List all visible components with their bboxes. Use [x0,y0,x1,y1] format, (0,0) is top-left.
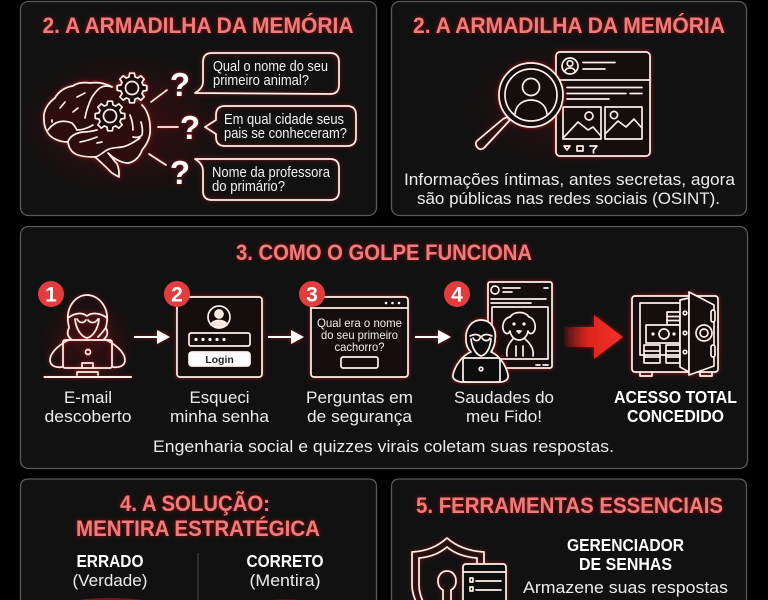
panel: memory trap questions [15,2,376,216]
bubble: teacher: Nome da professora [212,165,331,181]
badge 1 [38,281,64,307]
icon: brain with gears [44,73,150,177]
column: correct: CORRETO [246,551,324,571]
result: open safe [614,287,737,426]
panel: OSINT exposure [392,2,746,216]
step 4: hacker and dog post [444,281,554,426]
connector lines [149,90,178,165]
heading: strategic lie [76,491,320,541]
caption 4: Saudades do [454,388,554,407]
badge 4: 4 [451,284,463,306]
icon: hooded hacker [44,295,131,377]
icon: social post with dog [488,282,552,368]
question marks: ? [170,154,190,191]
window question [317,316,402,354]
password dots [194,338,226,341]
caption 1: E-mail [64,388,112,407]
question marks [170,66,200,191]
icon: browser window [311,297,408,377]
column: correct: (Mentira) [250,571,320,590]
bubble: first animal: primeiro animal? [213,73,309,89]
footer sentence: Engenharia social e quizzes virais coletam suas respostas. [153,437,614,456]
window question: Qual era o nome [317,316,402,330]
tool title: DE SENHAS [579,554,672,574]
badge 3: 3 [306,284,318,306]
heading: how it works: 3. COMO O GOLPE FUNCIONA [236,240,532,265]
column: wrong: ERRADO [76,551,144,571]
icon: second hacker [453,320,508,382]
panel: the solution [20,479,376,600]
window dots [385,302,400,304]
bubble: first animal [195,53,339,94]
question marks: ? [180,109,200,146]
step 3: security question [299,281,413,426]
heading: strategic lie: MENTIRA ESTRATÉGICA [76,516,320,541]
icon: shield with keyhole and window [412,538,506,600]
tool description: Armazene suas respostas [523,578,728,597]
bubble: parents' city [205,106,356,146]
badge 4 [444,281,470,307]
window question: cachorro? [334,340,385,354]
tool title: GERENCIADOR [567,535,684,555]
caption 2: Esqueci [190,388,250,407]
bubble: teacher: do primário? [212,179,285,195]
column: wrong: (Verdade) [72,571,148,590]
icon: open safe with money [632,292,718,376]
bubble: parents' city: Em qual cidade seus [224,112,344,128]
step 1: hacker at laptop [38,281,138,426]
caption 3 [306,388,413,426]
caption: total access [614,387,737,426]
icon: upper gear [117,73,147,103]
caption 1: descoberto [44,407,132,426]
login button label: Login [205,354,234,366]
heading: tools: 5. FERRAMENTAS ESSENCIAIS [416,493,723,518]
column: wrong [72,551,148,590]
icon: social profile card [556,52,650,156]
panel: essential tools [392,479,746,600]
icon: lower gear [95,101,125,131]
description text: Informações íntimas, antes secretas, agora [404,170,736,189]
badge 3 [299,281,325,307]
caption 4 [454,388,554,426]
description text [404,170,736,208]
caption 2 [170,388,270,426]
caption: total access: ACESSO TOTAL [614,387,737,407]
arrow 3 [415,330,451,344]
bubble: first animal: Qual o nome do seu [213,59,328,75]
arrow 1 [134,330,170,344]
big red arrow [564,315,623,359]
description text: são públicas nas redes sociais (OSINT). [417,189,720,208]
badge 1: 1 [45,284,57,306]
red glow of cropped icons [70,598,307,600]
caption 1 [44,388,132,426]
badge 2: 2 [171,284,183,306]
column: correct [246,551,324,590]
caption: total access: CONCEDIDO [627,406,724,426]
bubble: teacher [195,159,339,200]
icon: login card [177,297,262,377]
arrow 2 [268,330,304,344]
badge 2 [164,281,190,307]
tool title [567,535,684,574]
caption 3: Perguntas em [306,388,413,407]
heading: memory trap: 2. A ARMADILHA DA MEMÓRIA [42,13,354,38]
caption 4: meu Fido! [466,407,542,426]
caption 2: minha senha [170,407,270,426]
column divider [197,553,199,600]
panel: how the scam works [20,226,748,468]
heading: strategic lie: 4. A SOLUÇÃO: [120,491,270,516]
bubble: parents' city: pais se conheceram? [224,126,347,142]
question marks: ? [170,66,190,103]
window question: do seu primeiro [321,328,398,342]
heading: memory trap repeated: 2. A ARMADILHA DA MEMÓRIA [413,13,725,38]
icon: magnifying glass with person [476,63,563,149]
caption 3: de segurança [307,407,413,426]
step 2: login form [164,281,270,426]
